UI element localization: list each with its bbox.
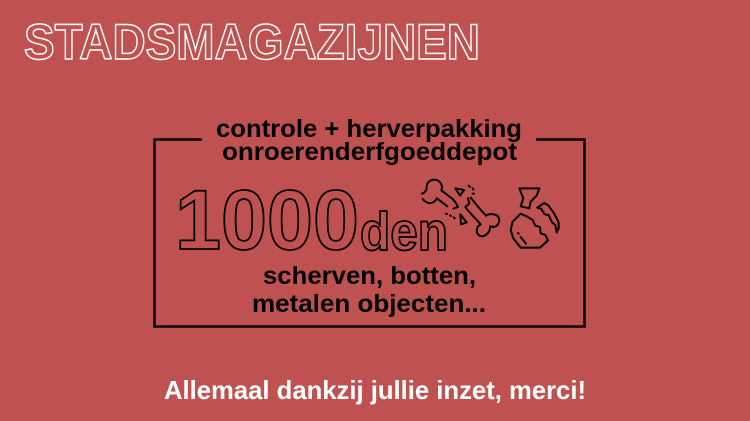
panel: frame bbox=[154, 140, 584, 326]
footer: thank you: Allemaal dankzij jullie inzet, merci! bbox=[164, 375, 586, 405]
heading: onroerenderfgoeddepot: onroerenderfgoeddepot bbox=[222, 138, 518, 166]
title: STADSMAGAZIJNEN bbox=[24, 14, 480, 70]
icon: broken pot bbox=[511, 188, 559, 248]
icon: broken bone bbox=[422, 180, 499, 236]
number: 1000: 1000 bbox=[175, 173, 359, 267]
heading: controle + herverpakking: controle + herverpakking bbox=[216, 115, 522, 143]
text: den: den bbox=[360, 202, 448, 262]
text: metalen objecten...: metalen objecten... bbox=[252, 290, 486, 318]
text: scherven, botten,: scherven, botten, bbox=[263, 262, 476, 290]
